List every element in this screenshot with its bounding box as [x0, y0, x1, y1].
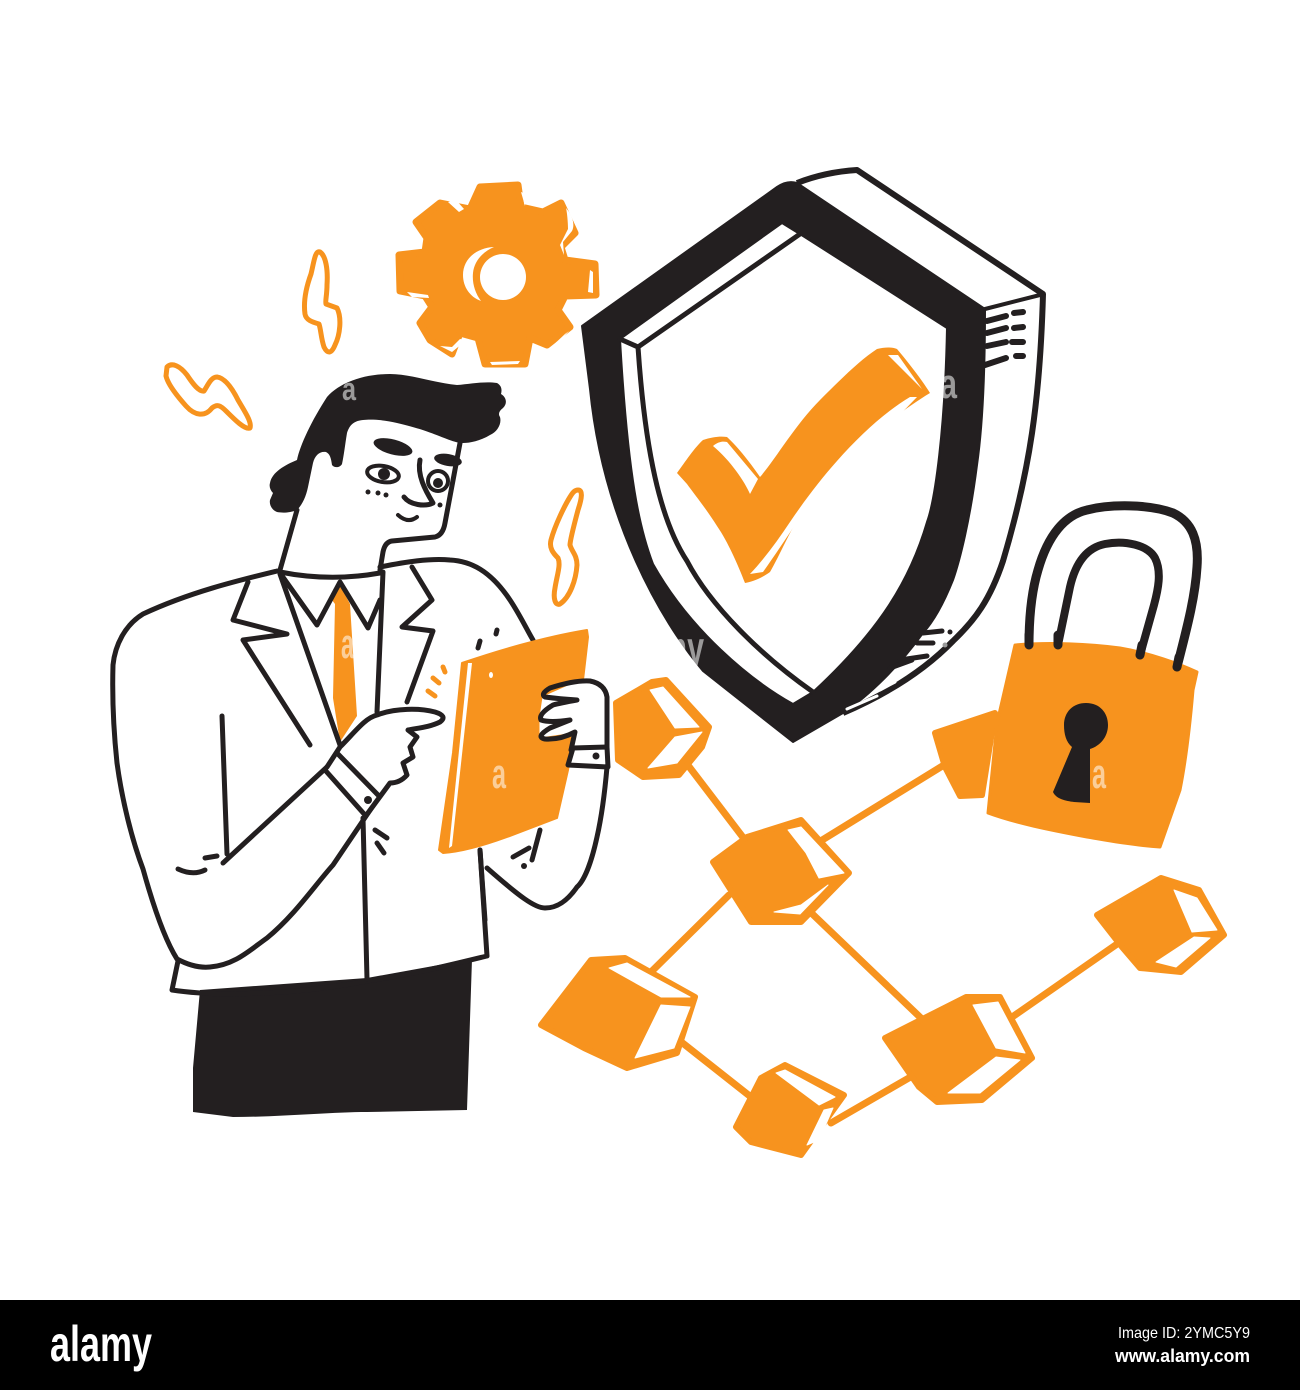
man in suit	[113, 374, 608, 1117]
shield inner bevel line	[620, 234, 813, 692]
shield side face	[797, 170, 1043, 713]
check mark	[677, 348, 930, 583]
stock watermark letters: a	[341, 620, 354, 667]
icon: gear	[399, 185, 596, 365]
network links	[650, 760, 1120, 1123]
site url: www.alamy.com	[1114, 1346, 1250, 1366]
tie	[332, 585, 357, 742]
block bottom	[736, 1065, 844, 1155]
image id: Image ID: 2YMC5Y9	[1118, 1325, 1250, 1342]
shield side dashes	[985, 295, 1040, 365]
block left	[541, 958, 695, 1068]
icon: lightning bolt top	[304, 252, 340, 352]
holding hand, cuff and forearm	[487, 681, 608, 908]
block centre	[713, 820, 849, 922]
icon: lightning bolt right	[550, 490, 581, 604]
arrow head	[935, 713, 995, 796]
lock body	[988, 644, 1197, 847]
block top	[616, 680, 709, 777]
shield lower brush texture	[847, 630, 952, 709]
neck and face outline	[280, 443, 460, 570]
face features	[366, 435, 463, 520]
icon: shield with check mark	[582, 170, 1043, 742]
shackle	[1029, 506, 1197, 667]
folder tablet	[439, 630, 588, 853]
stock watermark letters: a	[940, 360, 957, 407]
trousers	[193, 959, 472, 1117]
stock watermark letters: a	[342, 371, 356, 407]
shoulder ticks	[478, 630, 497, 648]
emphasis dashes near folder	[428, 667, 445, 696]
hair	[270, 374, 506, 513]
stock watermark letters: my	[660, 622, 704, 674]
icon: lightning bolt left	[166, 365, 250, 428]
block far right	[1097, 878, 1224, 972]
logo wordmark: alamy	[50, 1316, 152, 1372]
pointing hand and cuff	[325, 709, 443, 817]
stock watermark letters	[341, 360, 1106, 797]
shackle feet	[1029, 635, 1179, 667]
blockchain network	[541, 680, 1224, 1155]
keyhole	[1053, 703, 1108, 803]
jacket lines	[113, 559, 533, 994]
stock watermark letters: a	[492, 750, 506, 797]
block lower right	[885, 997, 1032, 1102]
stock watermark letters: a	[1092, 750, 1106, 797]
shield front ring	[582, 182, 985, 742]
footer bar	[0, 1300, 1300, 1390]
icon: padlock	[988, 506, 1197, 847]
